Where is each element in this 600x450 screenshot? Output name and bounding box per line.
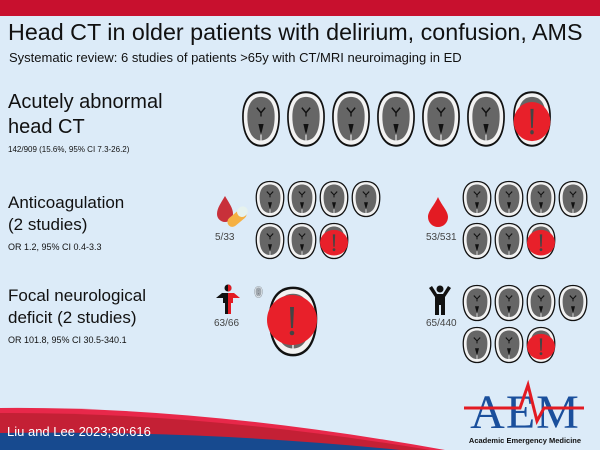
section 3 label: deficit (2 studies) bbox=[8, 308, 136, 327]
section 2 label: (2 studies) bbox=[8, 215, 87, 234]
title: Head CT in older patients with delirium, confusion, AMS bbox=[8, 19, 583, 45]
AEM logo: Academic Emergency Medicine bbox=[469, 436, 581, 445]
footer wave bbox=[0, 408, 445, 450]
text: 5/33 bbox=[215, 232, 234, 243]
big brain abnormal bbox=[267, 286, 318, 356]
subtitle: Systematic review: 6 studies of patients >65y with CT/MRI neuroimaging in ED bbox=[9, 50, 462, 65]
section 2 label: Anticoagulation bbox=[8, 193, 124, 212]
section 3 label: OR 101.8, 95% CI 30.5-340.1 bbox=[8, 335, 127, 345]
text: 65/440 bbox=[426, 318, 457, 329]
section 1 label: Acutely abnormal bbox=[8, 91, 163, 113]
section 1 brains bbox=[242, 91, 551, 147]
icon: person arms up bbox=[429, 286, 451, 315]
section 1 label: head CT bbox=[8, 116, 85, 138]
citation: Liu and Lee 2023;30:616 bbox=[7, 424, 151, 439]
icon: pills bbox=[217, 196, 248, 227]
section 3 label: Focal neurological bbox=[8, 286, 146, 305]
section 3 label bbox=[8, 286, 146, 345]
brains group anticoag bbox=[256, 180, 380, 260]
icon: half-red person bbox=[216, 284, 240, 314]
icon: tiny brain bbox=[254, 286, 263, 298]
section 1 label bbox=[8, 91, 163, 154]
brains group no anticoag bbox=[462, 180, 588, 260]
section 1 label: 142/909 (15.6%, 95% CI 7.3-26.2) bbox=[8, 145, 129, 154]
brains group no deficit bbox=[462, 284, 588, 364]
icon: blood drop bbox=[428, 197, 448, 227]
top bar bbox=[0, 0, 600, 16]
AEM logo bbox=[464, 380, 584, 445]
text: 53/531 bbox=[426, 232, 457, 243]
section 2 label: OR 1.2, 95% CI 0.4-3.3 bbox=[8, 242, 102, 252]
text: 63/66 bbox=[214, 318, 239, 329]
section 2 label bbox=[8, 193, 124, 252]
